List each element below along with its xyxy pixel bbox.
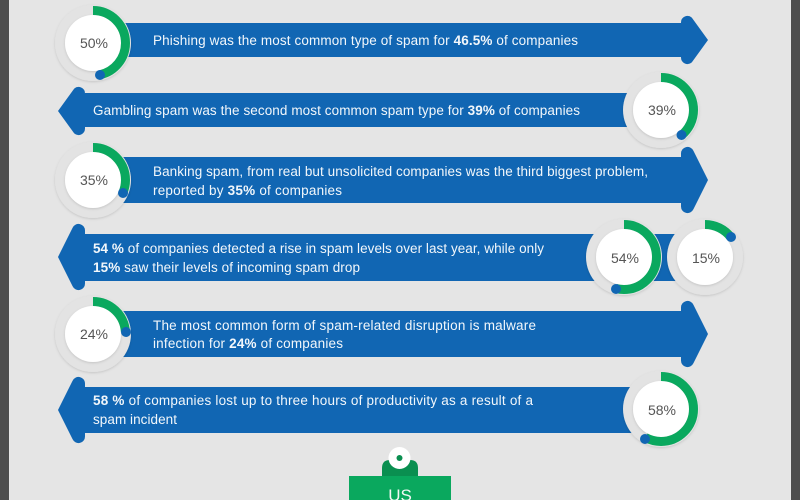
malware text — [153, 318, 536, 351]
banking text: Banking spam, from real but unsolicited companies was the third biggest problem, — [153, 164, 648, 179]
left dark edge — [0, 0, 9, 500]
donut 58%: 58% — [648, 402, 676, 418]
donut 35%: 35% — [80, 172, 108, 188]
right arrow — [120, 16, 708, 64]
donut 39% — [623, 72, 699, 148]
productivity text — [93, 393, 533, 427]
right dark edge — [791, 0, 800, 500]
donut 54%: 54% — [611, 250, 639, 266]
donut 15% — [667, 219, 743, 295]
tag body — [349, 476, 451, 500]
panel: productivity row — [58, 371, 699, 447]
donut 15%: 15% — [692, 250, 720, 266]
left arrow — [58, 377, 640, 443]
donut 24% — [55, 296, 131, 372]
panel: banking row — [55, 142, 708, 218]
malware text: The most common form of spam-related disruption is malware — [153, 318, 536, 333]
malware text: infection for 24% of companies — [153, 336, 343, 351]
panel: gambling row — [58, 72, 699, 148]
donut 50%: 50% — [80, 35, 108, 51]
right arrow — [120, 301, 708, 367]
donut 54% — [586, 219, 662, 295]
left arrow — [58, 224, 685, 290]
donut 58% — [623, 371, 699, 447]
donut 24%: 24% — [80, 326, 108, 342]
spam levels text — [93, 241, 544, 275]
banking text — [153, 164, 648, 198]
productivity text: spam incident — [93, 412, 177, 427]
tag hole — [388, 447, 410, 469]
spam levels text: 15% saw their levels of incoming spam drop — [93, 260, 360, 275]
banking text: reported by 35% of companies — [153, 183, 342, 198]
donut 35% — [55, 142, 131, 218]
phishing text: Phishing was the most common type of spam for 46.5% of companies — [153, 33, 578, 48]
donut 50% — [55, 5, 131, 81]
tag clip — [382, 460, 418, 477]
gambling text: Gambling spam was the second most common spam type for 39% of companies — [93, 103, 580, 118]
panel: phishing row — [55, 5, 708, 81]
panel: US tag — [349, 447, 451, 500]
left arrow — [58, 87, 650, 135]
panel: spam levels row — [58, 219, 743, 295]
right arrow — [120, 147, 708, 213]
tag dot — [396, 455, 402, 461]
spam levels text: 54 % of companies detected a rise in spam levels over last year, while only — [93, 241, 544, 256]
productivity text: 58 % of companies lost up to three hours of productivity as a result of a — [93, 393, 533, 408]
donut 39%: 39% — [648, 102, 676, 118]
panel: malware row — [55, 296, 708, 372]
